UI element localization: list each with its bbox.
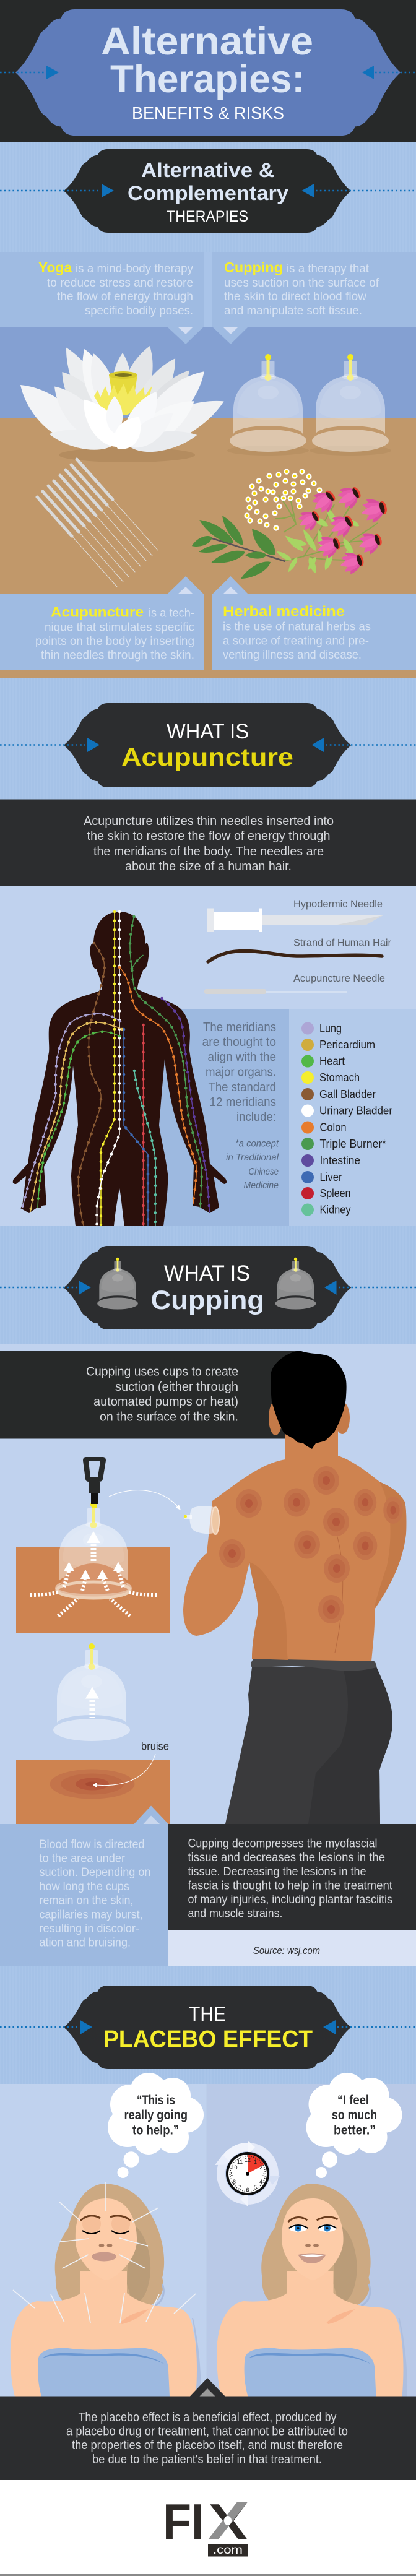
logo: FIX.com: X [208,2494,248,2550]
needles [13,2182,196,2323]
text: footnote: Chinese [249,1167,279,1177]
icon: clock with cycle arrows: 5 [254,2184,257,2190]
heading plaque: alternative and complementary [0,149,416,233]
heading plaque: alternative and complementary: Alternative & [141,159,274,181]
heading plaque: what is acupuncture: WHAT IS [167,720,249,743]
illustration: bruise [16,1740,170,1824]
legend: Gall Bladder [319,1088,376,1100]
pink coneflowers [293,480,390,578]
panel: herbal medicine: Herbal medicine [223,603,345,619]
panel: placebo description: be due to the patient's belief in that treatment. [92,2453,322,2466]
arrows: air and blood flow [30,1531,157,1616]
panel: placebo header background [0,1966,416,2084]
stems [275,495,378,561]
panel: blood flow text: how long the cups [40,1880,129,1893]
arrow: cup to shoulder [109,1490,181,1510]
panel: acupuncture intro: nique that stimulates specific [45,621,194,634]
panel: acupuncture intro: is a tech- [149,607,194,620]
icon: strand of hair: Strand of Human Hair [293,937,391,948]
ears [269,1401,282,1435]
icon: clock with cycle arrows: 2 [259,2164,262,2171]
panel: cupping decompression text: of many injuries, including plantar fasciitis [188,1893,392,1906]
heading plaque: the placebo effect: THE [189,2002,226,2025]
panel: herbal medicine [212,576,416,670]
icon: hypodermic needle [207,898,383,932]
icon: strand of hair [208,937,391,962]
panel: placebo right background [207,2084,416,2397]
icon: clock with cycle arrows: 7 [238,2184,241,2190]
panel: blood flow text: remain on the skin, [40,1894,134,1908]
legend: Intestine [319,1154,360,1167]
panel: cupping decompression text: Cupping decompresses the myofascial [188,1837,378,1851]
legend: Spleen [319,1187,350,1199]
panel: cupping decompression text: and muscle strains. [188,1908,282,1920]
legend: Stomach [319,1071,360,1084]
legend: Triple Burner* [319,1138,386,1150]
panel: cupping intro: uses suction on the surface of [224,277,379,290]
icon: acupuncture needle: Acupuncture Needle [293,972,385,984]
panel: blood flow text: to the area under [40,1852,126,1865]
meridian: triple burner [130,917,202,1208]
text: meridians note: major organs. [206,1066,276,1079]
text: meridians note [202,1021,276,1124]
panel: cupping description: automated pumps or heat) [93,1395,238,1409]
legend: Urinary Bladder [319,1104,392,1117]
meridian: gall bladder [78,943,105,1226]
panel: cupping intro [212,252,416,344]
thought cloud: after: better.” [334,2123,376,2138]
panel: yoga: to reduce stress and restore [47,277,193,290]
icon: header cup left [97,1258,138,1310]
text: footnote: in Traditional [226,1152,279,1163]
panel: cupping description [0,1351,297,1438]
panel: blood flow text: suction. Depending on [40,1866,151,1879]
nose and lips [92,2244,116,2262]
panel: cupping header background [0,1226,416,1344]
panel: footer [0,2480,416,2574]
panel: yoga: the flow of energy through [57,290,193,303]
heading plaque: what is cupping: WHAT IS [164,1261,250,1286]
heading plaque: what is cupping: Cupping [151,1286,264,1315]
panel: cupping intro: Cupping [224,259,283,275]
legend: Heart [319,1055,345,1067]
thought cloud: before [108,2073,204,2178]
title: BENEFITS & RISKS [132,103,284,123]
icon: clock with cycle arrows: 3 [261,2171,265,2177]
pants [225,1658,392,1824]
panel: cupping description: Cupping uses cups to create [86,1365,238,1379]
icon: clock with cycle arrows: 6 [246,2187,249,2193]
panel: yoga: Yoga [38,259,72,275]
text: footnote: *a concept [235,1139,279,1149]
legend: Liver [319,1171,342,1183]
icon: clock with cycle arrows: 8 [233,2179,236,2185]
source note [168,1930,416,1966]
illustration: man with cupping bruises [183,1351,406,1824]
panel: acupuncture description: about the size of a human hair. [125,860,292,873]
panel: placebo description: The placebo effect is a beneficial effect, produced by [78,2411,337,2424]
panel: cupping decompression text: fascia is thought to help in the treatment [188,1879,393,1893]
title [101,20,313,123]
panel: title plaque [0,9,416,136]
meridian: spleen [142,1025,144,1226]
panel: acupuncture intro [0,576,204,670]
icon: scene cup 1 [230,354,306,452]
stem and dark leaves [190,513,285,583]
heading plaque: the placebo effect: PLACEBO EFFECT [103,2026,313,2052]
icon: lotus flower [11,342,230,456]
panel: cupping description: on the surface of the skin. [100,1410,238,1424]
meridian: pericardium [30,1022,122,1212]
legend: Colon [319,1122,347,1134]
icon: clock with cycle arrows: 1 [254,2159,257,2165]
meridian: colon [119,967,196,1204]
legend: Lung [319,1022,342,1035]
panel: acupuncture intro: Acupuncture [51,604,144,620]
thought cloud: after [306,2073,402,2178]
icon: pump [83,1457,106,1508]
torso and arms [183,1424,406,1661]
white flower cluster [244,469,323,531]
icon: clock with cycle arrows [215,2140,280,2206]
text: meridians note: align with the [208,1050,276,1064]
panel: cupping illustration background [0,1344,416,1966]
icon: clock with cycle arrows: 10 [231,2164,238,2171]
arrow: title left [0,66,59,79]
panel: acupuncture description: the skin to restore the flow of energy through [87,829,331,843]
panel: placebo description [0,2378,416,2480]
panel: acupuncture header background [0,678,416,800]
title: Alternative [101,20,313,63]
meridian: lung [22,1014,120,1208]
logo: FIX.com: .com [213,2544,243,2557]
heading plaque: what is cupping [0,1246,416,1329]
panel: yoga [0,252,204,344]
thought cloud: after: “I feel [337,2093,369,2107]
icon: acupuncture needles [37,459,158,587]
heading plaque: what is acupuncture [0,703,416,787]
panel: meridians note background [155,1009,289,1226]
panel: blood flow text [0,1806,168,1966]
illustration: skin suction diagram [16,1457,170,1633]
panel: acupuncture description: Acupuncture utilizes thin needles inserted into [84,815,334,828]
panel: yoga: is a mind-body therapy [76,262,193,275]
icon: scene cup 2 [312,354,389,452]
panel: acupuncture description [0,800,416,886]
icon: clock with cycle arrows: 9 [230,2171,234,2177]
light green leaves [275,506,360,574]
heading plaque: the placebo effect [0,1986,416,2069]
panel: herbal medicine: venting illness and disease. [223,649,362,662]
text: meridians note: The standard [208,1081,276,1094]
legend: Pericardium [319,1039,375,1051]
panel: herbal medicine: a source of treating and pre- [223,635,369,647]
panel: placebo description: the properties of the placebo itself, and must therefore [72,2439,343,2452]
text: meridians note: are thought to [202,1035,276,1049]
panel: cupping intro: is a therapy that [287,262,370,275]
icon: hypodermic needle: Hypodermic Needle [293,898,383,910]
illustration: cup lifted [53,1643,130,1741]
panel: acupuncture intro: points on the body by inserting [35,635,194,648]
logo: FIX.com [163,2494,248,2557]
panel: intro header background [0,142,416,252]
panel: cupping decompression text [168,1824,416,1930]
icon: acupuncture needle [204,972,385,994]
icon: clock with cycle arrows: 4 [259,2179,262,2185]
nose and smile [298,2244,326,2263]
panel: blood flow text: ation and bruising. [40,1936,131,1950]
source note: Source: wsj.com [253,1945,320,1956]
heading plaque: what is acupuncture: Acupuncture [121,743,293,771]
bruises [219,1466,403,1623]
panel: herbal medicine: is the use of natural herbs as [223,620,371,634]
text: footnote [226,1139,279,1191]
panel: placebo left background [0,2084,207,2397]
meridian: stomach [101,912,115,1226]
illustration: bruise: bruise [141,1740,169,1753]
panel: cupping intro: the skin to direct blood flow [224,290,366,303]
title: Therapies: [110,58,305,101]
panel: cupping decompression text: tissue and decreases the lesions in the [188,1851,385,1864]
legend [301,1022,392,1216]
meridian: intestine [162,998,209,1212]
thought cloud: after: so much [332,2108,377,2122]
heading plaque: alternative and complementary: THERAPIES [167,208,248,225]
panel: meridians background [0,886,416,1226]
thought cloud: before: to help.” [132,2123,179,2138]
panel: placebo description: a placebo drug or treatment, that cannot be attributed to [66,2425,348,2439]
footer bar [0,2574,416,2576]
thought cloud: before: really going [124,2108,188,2122]
open eyes [288,2217,338,2232]
scene: table and sky [0,252,416,678]
meridian: heart [38,1032,119,1208]
heading plaque: alternative and complementary: Complementary [128,182,288,204]
arrow: title right [362,66,416,79]
meridian: urinary bladder [97,912,119,1226]
icon: herbs bouquet [190,469,390,583]
panel: blood flow text: resulting in discolor- [40,1922,139,1935]
text: meridians note: include: [236,1110,276,1124]
panel: title background [0,0,416,142]
body with meridian lines [13,912,227,1226]
panel: cupping decompression text: tissue. Decreasing the lesions in the [188,1865,366,1878]
panel: legend background [289,1009,416,1226]
text: meridians note: The meridians [203,1021,276,1034]
panel: acupuncture description: the meridians of the body. The needles are [93,845,324,858]
illustration: woman smiling after treatment [217,2184,407,2397]
legend: Kidney [319,1203,350,1216]
panel: blood flow text: capillaries may burst, [40,1909,142,1921]
hair [271,1351,347,1449]
panel: cupping intro: and manipulate soft tissue. [224,305,362,318]
panel: acupuncture intro: thin needles through the skin. [41,649,194,662]
thought cloud: before: “This is [137,2093,175,2107]
text: meridians note: 12 meridians [209,1096,276,1109]
closed eyes [80,2215,131,2234]
meridian: liver [124,1029,148,1226]
icon: clock with cycle arrows: 12 [245,2157,251,2163]
panel: yoga: specific bodily poses. [85,305,193,318]
meridian: kidney [134,1071,155,1226]
shoulder cup [184,1506,219,1534]
text: footnote: Medicine [244,1180,279,1191]
pistil [109,371,137,402]
illustration: woman receiving acupuncture [11,2182,201,2397]
icon: header cup right [275,1258,316,1310]
stamens [94,384,152,415]
logo: FIX.com: FI [163,2494,204,2550]
panel: cupping description: suction (either through [115,1380,238,1394]
panel: blood flow text: Blood flow is directed [40,1838,145,1851]
icon: clock with cycle arrows: 11 [237,2159,243,2165]
